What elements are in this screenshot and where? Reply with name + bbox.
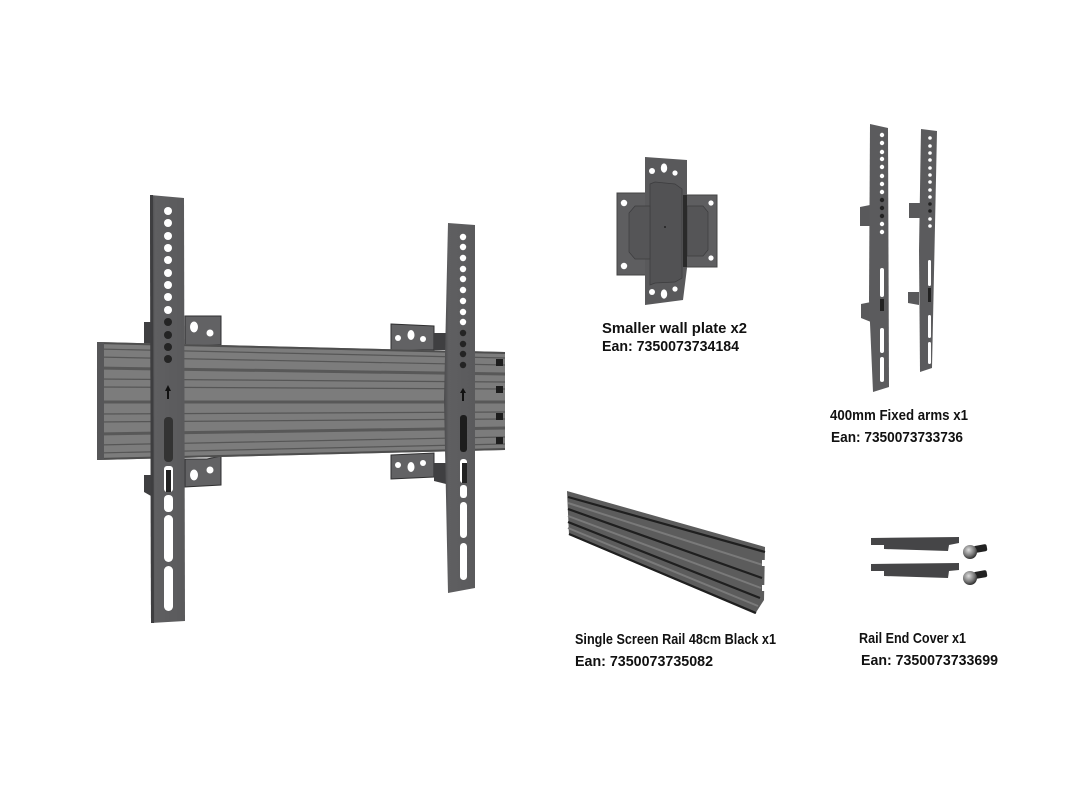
horizontal rail [97,342,505,460]
label: rail end cover: Rail End Cover x1 [859,630,966,647]
rail end slots [496,359,503,444]
label: single screen rail [575,631,776,670]
label: rail end cover: Ean: 7350073733699 [861,652,998,669]
wall plate brackets behind rail [185,316,434,487]
label: single screen rail: Ean: 7350073735082 [575,653,713,670]
right vertical arm [444,223,475,593]
label: 400mm fixed arms [830,407,968,446]
component: rail end covers and screws [871,537,988,585]
main product: assembled mount [97,195,505,623]
component: 400mm fixed arms [860,124,937,392]
label: smaller wall plate [602,320,747,355]
label: smaller wall plate: Smaller wall plate x2 [602,320,747,337]
component: smaller wall plate [617,157,717,305]
label: 400mm fixed arms: Ean: 7350073733736 [831,429,963,446]
component: single screen rail [567,491,766,614]
label: rail end cover [859,630,998,669]
label: single screen rail: Single Screen Rail 48cm Black x1 [575,631,776,648]
left vertical arm [150,195,185,623]
label: smaller wall plate: Ean: 7350073734184 [602,338,740,355]
label: 400mm fixed arms: 400mm Fixed arms x1 [830,407,968,424]
